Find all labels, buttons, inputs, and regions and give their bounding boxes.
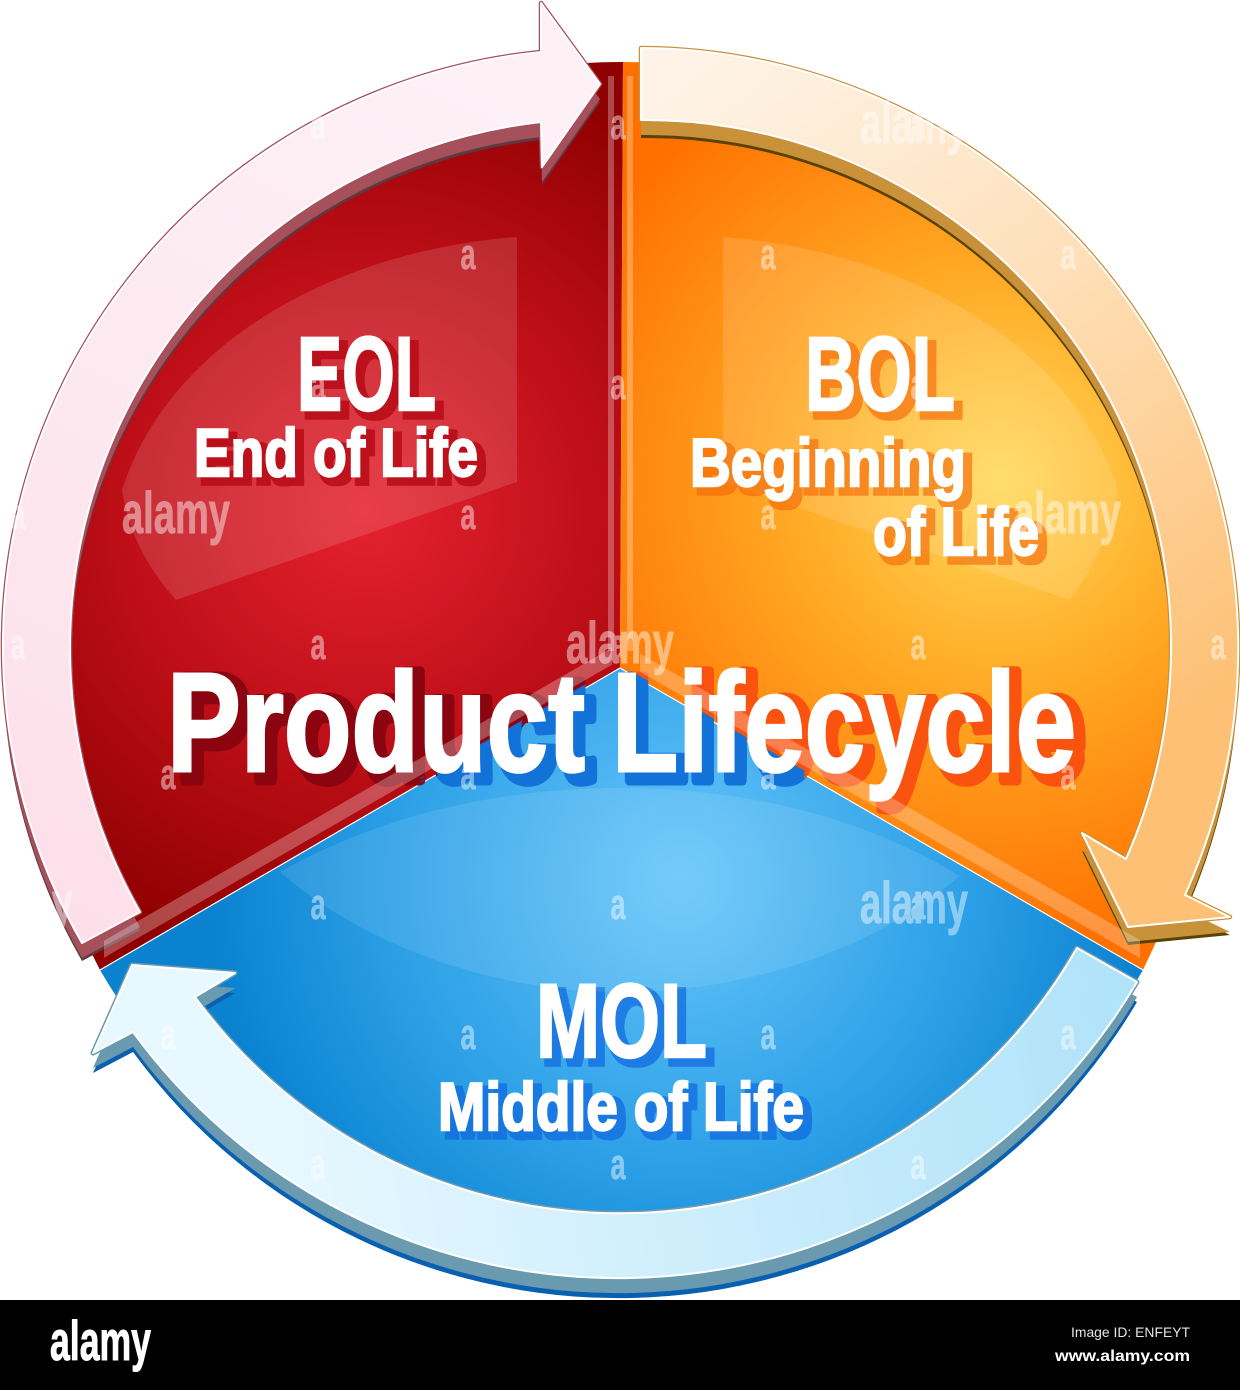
watermark: a [310, 100, 326, 149]
glass highlight: BOL [723, 237, 1118, 600]
title shadow [167, 643, 1076, 801]
divider band: orange and blue [640, 654, 1140, 958]
watermark: a [910, 1140, 926, 1189]
title [167, 643, 1076, 801]
watermark: a [460, 1010, 476, 1059]
watermark: a [910, 620, 926, 669]
watermark: a [760, 750, 776, 799]
label: BOL [690, 316, 1039, 570]
watermark [0, 91, 1226, 1189]
watermark: a [160, 750, 176, 799]
label: MOL [438, 963, 804, 1145]
title shadow: Product [167, 643, 585, 801]
label: BOL: of Life [873, 494, 1039, 570]
panel: EOL red segment [18, 62, 623, 970]
label: MOL: Middle of Life [438, 1069, 804, 1145]
watermark: a [10, 490, 26, 539]
divider band: red and blue [104, 648, 612, 958]
footer image id: Image ID: ENFEYT [1071, 1324, 1190, 1340]
watermark: a [1060, 750, 1076, 799]
watermark: a [760, 1010, 776, 1059]
watermark: alamy [860, 91, 968, 156]
watermark: alamy [1013, 481, 1121, 546]
title: Lifecycle [612, 643, 1076, 801]
arrow: EOL to BOL [3, 3, 600, 961]
watermark: a [610, 1140, 626, 1189]
watermark: a [910, 360, 926, 409]
footer bar [0, 1300, 1240, 1390]
label: MOL: MOL [536, 963, 707, 1080]
watermark: a [310, 1140, 326, 1189]
glass highlight: MOL [280, 788, 960, 992]
label: BOL: BOL [805, 316, 955, 433]
watermark: a [460, 230, 476, 279]
label: BOL: Beginning [690, 425, 966, 501]
watermark: a [10, 620, 26, 669]
glass highlight: EOL [122, 237, 517, 600]
watermark: a [1060, 1010, 1076, 1059]
footer url: www.alamy.com [1054, 1348, 1190, 1365]
watermark: a [610, 360, 626, 409]
watermark: a [310, 360, 326, 409]
watermark: alamy [122, 481, 230, 546]
panel: MOL blue segment [100, 668, 1143, 1270]
watermark: a [610, 100, 626, 149]
watermark: alamy [860, 871, 968, 936]
title: Product [167, 643, 585, 801]
arrow: BOL to MOL [641, 48, 1238, 945]
watermark: a [310, 880, 326, 929]
label: EOL: End of Life [194, 415, 478, 491]
watermark: a [610, 880, 626, 929]
watermark: a [460, 750, 476, 799]
watermark: a [310, 620, 326, 669]
watermark: a [1060, 230, 1076, 279]
watermark: a [460, 490, 476, 539]
footer logo: alamy [50, 1309, 151, 1372]
label: EOL [194, 316, 478, 491]
watermark: a [910, 880, 926, 929]
watermark: a [760, 230, 776, 279]
watermark: a [160, 1010, 176, 1059]
title shadow: Lifecycle [612, 643, 1076, 801]
watermark: alamy [566, 611, 674, 676]
watermark: a [910, 100, 926, 149]
watermark: a [610, 620, 626, 669]
watermark: a [760, 490, 776, 539]
arrow: MOL to EOL [93, 948, 1137, 1298]
panel: BOL orange segment [620, 62, 1223, 970]
label: EOL: EOL [297, 316, 436, 433]
watermark: a [1210, 620, 1226, 669]
